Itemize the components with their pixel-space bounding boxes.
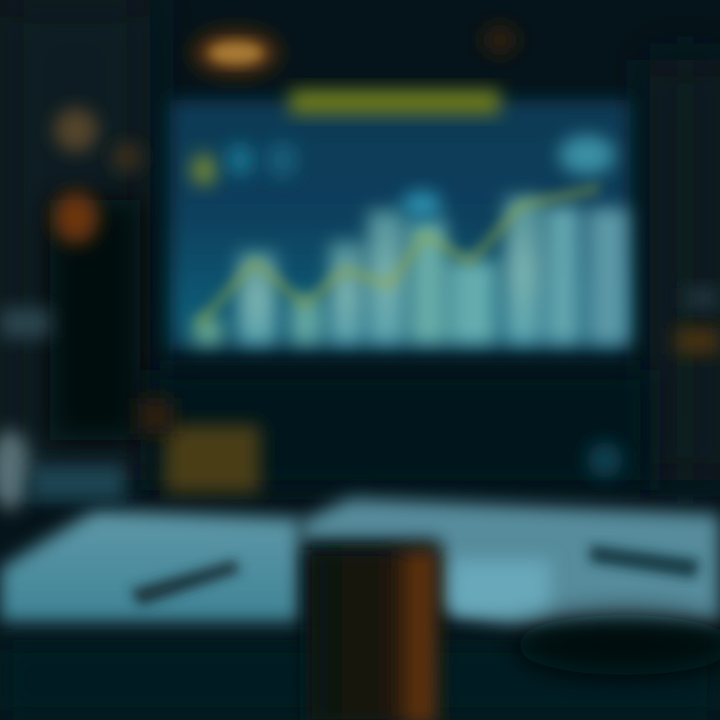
foreground cup	[306, 550, 440, 720]
chart highlight	[402, 191, 442, 219]
pen on desk	[130, 560, 240, 606]
bar chart	[194, 196, 628, 344]
desk with papers	[0, 430, 720, 675]
monitor	[170, 90, 630, 350]
dashboard icons	[191, 135, 615, 186]
yellow box on shelf	[138, 398, 260, 493]
monitor screen	[170, 100, 630, 350]
chart trend line	[198, 188, 600, 325]
background bokeh lights	[0, 24, 720, 478]
chart title bar	[290, 90, 500, 114]
ceiling lamp	[192, 29, 280, 77]
device on desk	[590, 545, 700, 578]
dark object on desk	[515, 615, 720, 675]
